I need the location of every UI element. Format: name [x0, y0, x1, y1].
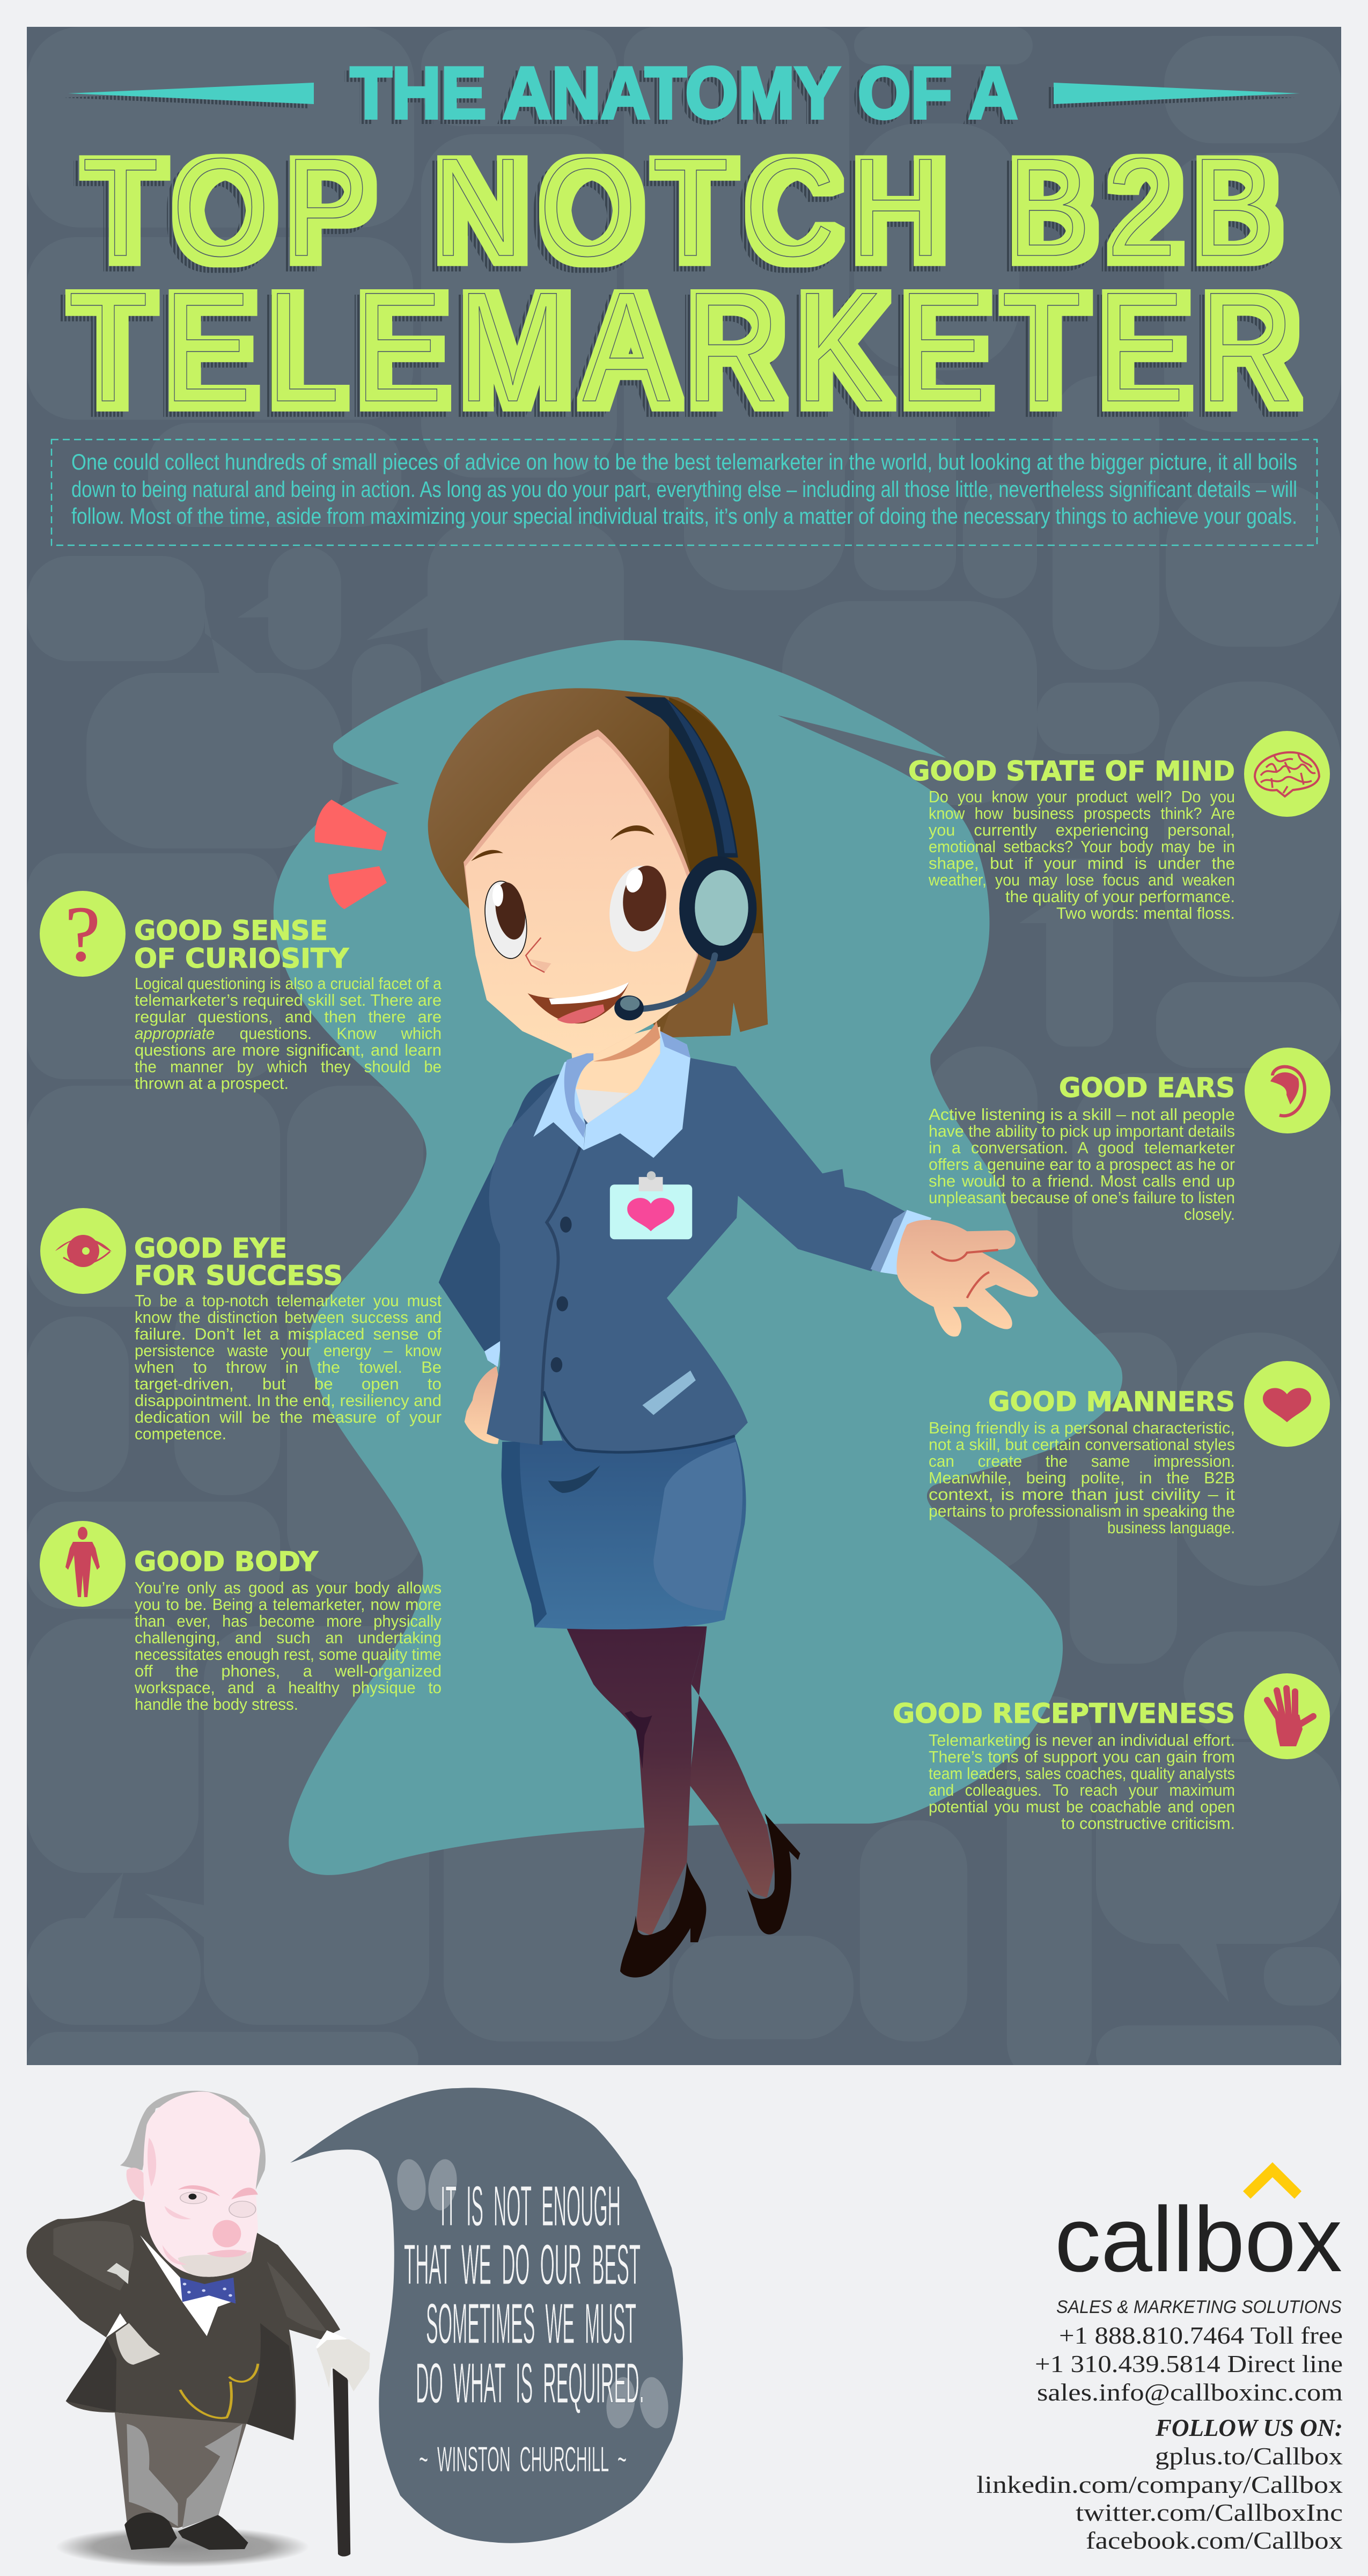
bow tie	[180, 2278, 236, 2303]
pocket square	[107, 2263, 129, 2284]
body text: appropriate questions. Know which	[135, 1024, 442, 1043]
body text: telemarketer’s required skill set. There are	[135, 991, 442, 1009]
jacket hem shadow	[543, 1392, 735, 1452]
body text: Do you know your product well? Do you	[929, 787, 1235, 806]
hair	[120, 2091, 266, 2190]
body text: potential you must be coachable and open	[929, 1797, 1235, 1816]
section: good receptiveness	[893, 1673, 1330, 1833]
icon: heart	[1244, 1361, 1330, 1447]
body text: necessitates enough rest, some quality time	[135, 1645, 442, 1664]
contact details: +1 888.810.7464 Toll free	[1059, 2322, 1343, 2349]
title: the anatomy of a	[68, 52, 1300, 134]
body text: than ever, has become more physically	[135, 1612, 442, 1630]
icon: ear	[1245, 1048, 1330, 1133]
body text: know the distinction between success and	[135, 1308, 442, 1327]
social links: facebook.com/Callbox	[1086, 2527, 1343, 2554]
brows	[471, 825, 654, 861]
section: good body	[40, 1521, 442, 1714]
heading: GOOD MANNERS	[988, 1386, 1235, 1417]
cane	[333, 2369, 350, 2557]
headset microphone	[614, 955, 715, 1020]
section: good sense of curiosity	[40, 890, 442, 1093]
body text: in a conversation. A good telemarketer	[929, 1138, 1235, 1157]
knee shadow	[624, 1711, 652, 1769]
neck shadow	[593, 1021, 660, 1062]
front leg	[566, 1627, 707, 1936]
speech bubble pattern	[27, 27, 1341, 2085]
body text: There’s tons of support you can gain from	[929, 1747, 1235, 1766]
jacket lighter folds	[53, 2221, 327, 2331]
icon: hand	[1244, 1673, 1330, 1759]
opening quote marks	[394, 2157, 460, 2212]
callbox logo	[1055, 2162, 1342, 2291]
body text: the manner by which they should be	[135, 1057, 442, 1076]
jacket darker panels	[66, 2323, 295, 2440]
body text: unpleasant because of one’s failure to listen	[929, 1188, 1235, 1207]
body text: pertains to professionalism in speaking the	[929, 1502, 1235, 1520]
social links: twitter.com/CallboxInc	[1076, 2499, 1343, 2526]
bubble shape	[290, 2088, 683, 2543]
lips	[207, 2250, 247, 2257]
jaw shading	[178, 2251, 251, 2277]
hair dark right side	[669, 697, 763, 947]
quote speech bubble	[290, 2088, 683, 2543]
coral exclamation marks	[315, 800, 387, 909]
undershirt	[575, 1089, 629, 1124]
breast pocket	[642, 1371, 696, 1415]
trousers	[115, 2412, 247, 2528]
body text: You’re only as good as your body allows	[135, 1578, 442, 1597]
section: good eye for success	[40, 1208, 442, 1443]
headset band highlight	[667, 700, 736, 853]
body text: persistence waste your energy – know	[135, 1341, 442, 1360]
icon: question mark	[40, 890, 126, 977]
right eye	[604, 862, 672, 955]
heading: OF CURIOSITY	[134, 943, 349, 974]
body text: weather, you may lose focus and weaken	[928, 870, 1235, 889]
back shoe	[747, 1813, 800, 1935]
skirt	[502, 1437, 746, 1629]
body text: thrown at a prospect.	[135, 1074, 289, 1093]
social links: gplus.to/Callbox	[1155, 2442, 1343, 2470]
body text: challenging, and such an undertaking	[135, 1628, 442, 1647]
left arrow wedge	[68, 83, 314, 104]
nose	[212, 2220, 241, 2248]
skirt pocket	[548, 1465, 600, 1493]
body text: when to throw in the towel. Be	[134, 1358, 442, 1377]
heading	[134, 1233, 343, 1291]
section: good manners	[929, 1361, 1330, 1537]
body text: dedication will be the measure of your	[135, 1408, 442, 1426]
icon: human body	[40, 1521, 126, 1607]
left hand	[465, 1366, 504, 1444]
jacket	[26, 2199, 340, 2440]
body text: the quality of your performance.	[1005, 887, 1235, 906]
neck	[571, 1027, 660, 1124]
body text: Being friendly is a personal characteristic,	[929, 1418, 1235, 1437]
body text	[134, 1291, 442, 1443]
text: THAT WE DO OUR BEST	[404, 2233, 641, 2296]
body text: to constructive criticism.	[1061, 1814, 1235, 1833]
social links	[976, 2414, 1343, 2554]
body text: failure. Don’t let a misplaced sense of	[135, 1324, 442, 1343]
skirt shaded side	[502, 1442, 547, 1627]
body text: target-driven, but be open to	[135, 1374, 442, 1393]
social links: linkedin.com/company/Callbox	[976, 2471, 1343, 2498]
intro text box	[52, 440, 1317, 545]
body text: have the ability to pick up important details	[929, 1122, 1235, 1140]
mouth	[528, 982, 629, 1023]
body text: regular questions, and then there are	[135, 1007, 442, 1026]
quote speech bubble: ~ WINSTON CHURCHILL ~	[419, 2439, 627, 2479]
eye left	[180, 2192, 207, 2204]
lower body	[502, 1437, 800, 1978]
tagline: SALES & MARKETING SOLUTIONS	[1056, 2297, 1342, 2317]
ground shadow	[56, 2527, 309, 2567]
body text: Active listening is a skill – not all people	[929, 1105, 1235, 1124]
body text	[135, 974, 442, 1093]
body text: Meanwhile, being polite, in the B2B	[929, 1468, 1235, 1487]
hair lighter lower right	[660, 933, 768, 1038]
right arrow wedge	[1054, 83, 1300, 104]
contact details: +1 310.439.5814 Direct line	[1035, 2350, 1343, 2377]
body text	[929, 1105, 1235, 1224]
body text: can create the same impression.	[929, 1452, 1235, 1470]
body text: disappointment. In the end, resiliency and	[135, 1391, 442, 1410]
body text: emotional setbacks? Your body may be in	[929, 837, 1235, 856]
text: IT IS NOT ENOUGH	[440, 2175, 621, 2238]
name badge	[610, 1171, 692, 1239]
body text: handle the body stress.	[135, 1695, 298, 1714]
title line one: THE ANATOMY OF A	[350, 52, 1018, 134]
shirt collar left	[533, 1051, 593, 1150]
brow	[178, 2185, 258, 2199]
body text: team leaders, sales coaches, quality analysts	[929, 1764, 1235, 1783]
shoes	[124, 2513, 248, 2550]
text: DO WHAT IS REQUIRED.	[416, 2352, 644, 2415]
front shoe	[620, 1862, 706, 1978]
body text: you currently experiencing personal,	[929, 821, 1235, 839]
social links: FOLLOW US ON:	[1155, 2414, 1343, 2441]
body text	[929, 1731, 1235, 1833]
body text: shape, but if your mind is under the	[929, 854, 1235, 873]
body text: context, is more than just civility – it	[929, 1485, 1235, 1504]
heading: GOOD EARS	[1059, 1072, 1235, 1103]
icon: brain	[1244, 731, 1330, 817]
body text: off the phones, a well-organized	[135, 1662, 442, 1680]
shirt collar right fold	[660, 1031, 690, 1058]
left hand	[116, 2323, 160, 2365]
closing quote marks	[604, 2375, 671, 2430]
body text: Telemarketing is never an individual effort.	[929, 1731, 1235, 1750]
heading: GOOD BODY	[134, 1546, 319, 1577]
skirt lighter panel	[653, 1442, 742, 1611]
headset ear cup	[679, 856, 756, 961]
body text: she would to a friend. Most calls end up	[929, 1172, 1235, 1190]
heading: GOOD RECEPTIVENESS	[893, 1698, 1235, 1729]
jacket seam	[541, 1136, 585, 1445]
churchill character	[26, 2091, 370, 2567]
intro paragraph	[71, 449, 1297, 529]
body text: Logical questioning is also a crucial facet of a	[135, 974, 442, 993]
heading: GOOD STATE OF MIND	[908, 756, 1235, 787]
text: SOMETIMES WE MUST	[426, 2292, 636, 2355]
ear	[127, 2168, 147, 2201]
body text: and colleagues. To reach your maximum	[929, 1781, 1235, 1799]
right cuff	[871, 1210, 931, 1275]
contact details: sales.info@callboxinc.com	[1037, 2379, 1343, 2406]
body text: know how business prospects think? Are	[929, 804, 1235, 823]
contact details	[1035, 2322, 1343, 2406]
icon: question mark: ?	[65, 890, 100, 977]
body text	[134, 1578, 442, 1714]
back leg	[689, 1627, 775, 1898]
shirt collar left fold	[564, 1051, 593, 1138]
body text: you to be. Being a telemarketer, now more	[135, 1595, 442, 1614]
face	[464, 729, 698, 1053]
shirt front	[140, 2235, 236, 2336]
section: good ears	[929, 1048, 1330, 1224]
nose	[526, 938, 551, 972]
left cuff	[106, 2314, 127, 2338]
head	[143, 2092, 260, 2277]
heading	[134, 915, 349, 974]
left eye	[479, 878, 532, 962]
body text: competence.	[135, 1424, 226, 1443]
watch chain	[180, 2363, 258, 2418]
heading: GOOD SENSE	[134, 915, 328, 946]
logo caret	[1243, 2162, 1301, 2199]
body text: not a skill, but certain conversational styles	[929, 1435, 1235, 1454]
face skin	[465, 736, 697, 1053]
shirt collar right	[584, 1031, 690, 1158]
dashed border	[52, 440, 1317, 545]
body text	[929, 1418, 1235, 1537]
jacket buttons	[551, 1217, 572, 1372]
right hand	[317, 2339, 370, 2391]
hair back	[428, 688, 768, 1038]
body text: To be a top-notch telemarketer you must	[135, 1291, 442, 1310]
headset band	[624, 697, 738, 858]
eye right	[229, 2201, 256, 2218]
trouser highlights	[127, 2424, 242, 2528]
heading: GOOD EYE	[134, 1233, 287, 1264]
teal blob behind character	[274, 640, 1122, 1875]
logo wordmark: callbox	[1055, 2188, 1342, 2291]
left cuff	[484, 1340, 502, 1367]
right hand	[896, 1220, 1038, 1337]
cheek shading	[148, 2138, 191, 2265]
heading: FOR SUCCESS	[134, 1260, 343, 1291]
body text: business language.	[1107, 1518, 1235, 1537]
body text: closely.	[1184, 1205, 1235, 1224]
body text: workspace, and a healthy physique to	[134, 1678, 442, 1697]
quote text	[404, 2175, 644, 2415]
jacket body	[487, 1058, 905, 1452]
right cuff	[316, 2330, 347, 2349]
main panel background	[27, 27, 1341, 2065]
section: good state of mind	[908, 731, 1330, 923]
left arm	[439, 1073, 562, 1365]
body text	[928, 787, 1235, 923]
icon: eye	[40, 1208, 126, 1294]
telemarketer character	[428, 688, 1038, 1978]
body text: questions are more significant, and learn	[135, 1041, 442, 1059]
body text: offers a genuine ear to a prospect as he or	[929, 1155, 1235, 1174]
body text: Two words: mental floss.	[1056, 904, 1235, 923]
